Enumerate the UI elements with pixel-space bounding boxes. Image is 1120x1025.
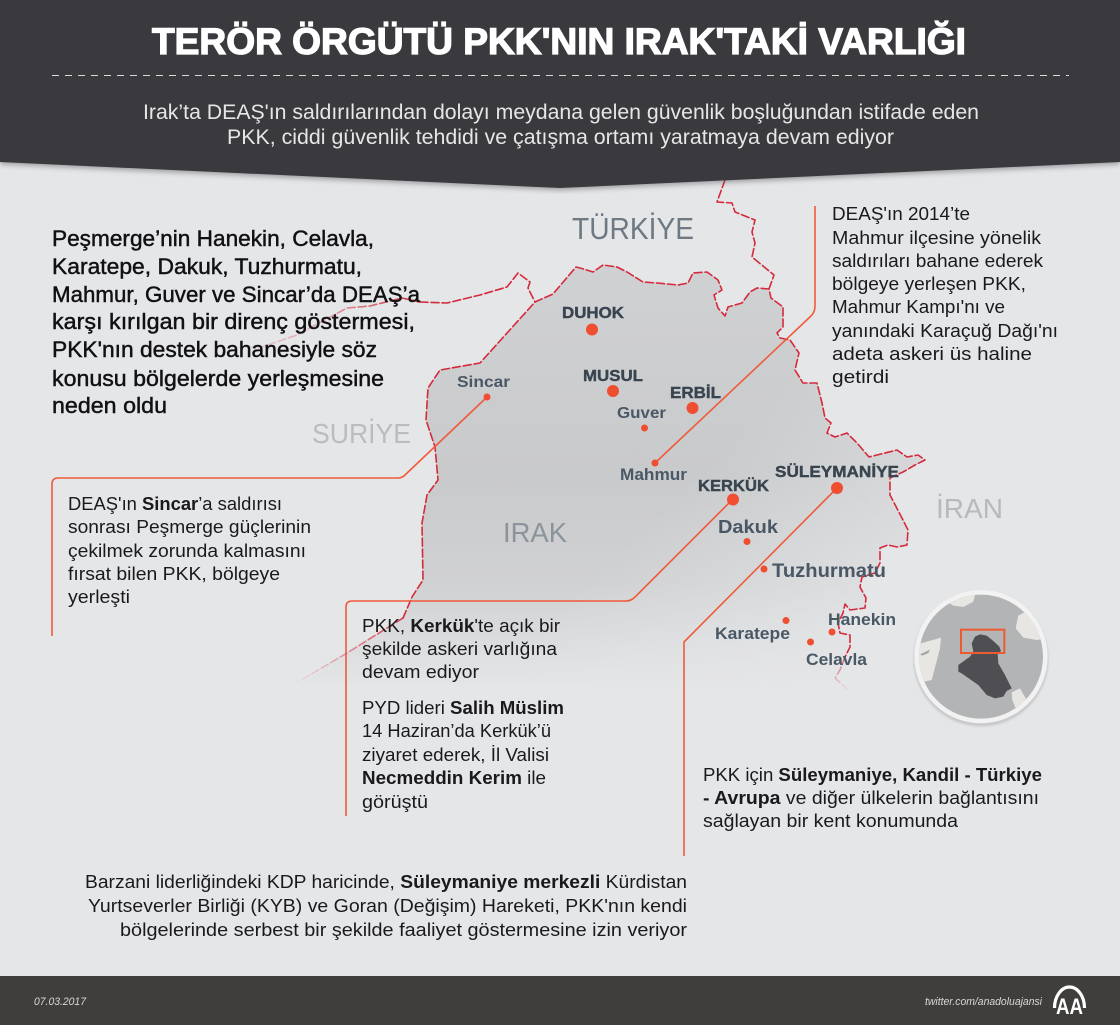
border: fading south east bbox=[835, 657, 848, 690]
leader line: Süleymaniye bbox=[684, 488, 837, 856]
text block: Peşmerge lead paragraph: Mahmur, Guver ve Sincar’da DEAŞ’a bbox=[52, 282, 421, 307]
text block: Mahmur: getirdi bbox=[832, 367, 889, 387]
label: İran: İRAN bbox=[936, 493, 1003, 524]
text block: Peşmerge lead paragraph bbox=[52, 226, 421, 418]
text block: KDP and KYB: bölgelerinde serbest bir şekilde faaliyet göstermesine izin veriyor bbox=[120, 920, 687, 940]
leader line: Mahmur bbox=[655, 206, 815, 463]
town: Tuzhurmatu: Tuzhurmatu bbox=[772, 561, 886, 582]
text block: KDP and KYB bbox=[85, 872, 687, 940]
city labels and markers bbox=[457, 305, 899, 669]
text block: Peşmerge lead paragraph: PKK'nın destek bahanesiyle söz bbox=[52, 337, 377, 362]
inset white ring bbox=[914, 590, 1048, 723]
town: Sincar: Sincar bbox=[457, 374, 510, 391]
header band bbox=[0, 0, 1120, 190]
town: Celavla: Celavla bbox=[806, 651, 868, 669]
leader line: Kerkük bbox=[346, 499, 733, 816]
city: Süleymaniye: SÜLEYMANİYE bbox=[775, 462, 899, 481]
town: Guver bbox=[617, 405, 666, 432]
text block: Mahmur: saldırıları bahane ederek bbox=[832, 251, 1044, 271]
text block: Peşmerge lead paragraph: konusu bölgelerde yerleşmesine bbox=[52, 366, 384, 391]
city: Musul bbox=[583, 368, 643, 397]
subtitle: Irak’ta DEAŞ'ın saldırılarından dolayı meydana gelen güvenlik boşluğundan istifade eden bbox=[143, 101, 979, 124]
city: Erbil bbox=[670, 384, 721, 414]
twitter handle: twitter.com/anadoluajansi bbox=[925, 996, 1043, 1008]
border: Syria and Turkey bbox=[420, 273, 535, 303]
text block: Sincar: fırsat bilen PKK, bölgeye bbox=[68, 564, 280, 584]
label: Suriye: SURİYE bbox=[312, 418, 411, 449]
text block: Peşmerge lead paragraph: Peşmerge’nin Hanekin, Celavla, bbox=[52, 226, 374, 251]
text block: Kerkük: PKK, Kerkük'te açık bir bbox=[362, 616, 560, 636]
date: 07.03.2017 bbox=[34, 996, 87, 1008]
text block: Sincar: çekilmek zorunda kalmasını bbox=[68, 541, 306, 561]
text block: Süleymaniye: sağlayan bir kent konumunda bbox=[703, 811, 959, 831]
town: Guver: Guver bbox=[617, 405, 666, 422]
text block: Mahmur: Mahmur ilçesine yönelik bbox=[832, 228, 1042, 248]
Iraq land shape bbox=[293, 265, 925, 690]
city: Kerkük bbox=[698, 476, 769, 506]
border: Iraq west and north bbox=[403, 265, 925, 657]
icon: Anadolu Agency logo: AA bbox=[1056, 994, 1083, 1019]
text block: Kerkük: görüştü bbox=[362, 792, 428, 812]
text block: Kerkük: 14 Haziran’da Kerkük’ü bbox=[362, 721, 551, 741]
city: Kerkük: KERKÜK bbox=[698, 476, 769, 495]
city: Süleymaniye bbox=[775, 462, 899, 494]
text block: Mahmur: adeta askeri üs haline bbox=[832, 344, 1032, 364]
text block: Kerkük: Necmeddin Kerim ile bbox=[362, 768, 546, 788]
city: Duhok bbox=[562, 305, 624, 336]
inset Cyprus bbox=[920, 650, 930, 656]
text block: Sincar: yerleşti bbox=[68, 587, 130, 607]
border: Syria and Turkey fading west bbox=[213, 298, 420, 348]
inset shadow bbox=[914, 592, 1048, 726]
header background bbox=[0, 0, 1120, 188]
icon: Anadolu Agency logo bbox=[1054, 987, 1084, 1019]
border: fading south west bbox=[293, 618, 403, 685]
text block: Sincar: sonrası Peşmerge güçlerinin bbox=[68, 517, 311, 537]
text block: Kerkük bbox=[362, 616, 564, 812]
text block: Kerkük: ziyaret ederek, İl Valisi bbox=[362, 745, 549, 765]
text block: Kerkük: şekilde askeri varlığına bbox=[362, 639, 558, 659]
town: Karatepe: Karatepe bbox=[715, 624, 790, 643]
leader line: Sincar bbox=[52, 397, 487, 636]
subtitle bbox=[143, 101, 979, 149]
text block: Süleymaniye: - Avrupa ve diğer ülkelerin bağlantısını bbox=[703, 788, 1039, 808]
text block: KDP and KYB: Yurtseverler Birliği (KYB) ve Goran (Değişim) Hareketi, PKK'nın kendi bbox=[88, 896, 687, 916]
text block: Kerkük: devam ediyor bbox=[362, 662, 479, 682]
town: Dakuk: Dakuk bbox=[718, 517, 779, 537]
text block: Mahmur: DEAŞ'ın 2014’te bbox=[832, 204, 970, 224]
city: Duhok: DUHOK bbox=[562, 305, 624, 322]
leader lines bbox=[52, 206, 837, 856]
inset highlight rectangle bbox=[961, 630, 1004, 653]
text block: Mahmur: yanındaki Karaçuğ Dağı'nı bbox=[832, 321, 1058, 341]
town: Sincar bbox=[457, 374, 510, 400]
town: Dakuk bbox=[718, 517, 779, 545]
Iraq land eastern fade bbox=[293, 265, 925, 690]
text block: Süleymaniye: PKK için Süleymaniye, Kandil - Türkiye bbox=[703, 765, 1042, 785]
dashed divider bbox=[52, 74, 1069, 76]
city: Musul: MUSUL bbox=[583, 368, 643, 385]
town: Mahmur: Mahmur bbox=[620, 465, 687, 484]
text block: Mahmur: bölgeye yerleşen PKK, bbox=[832, 274, 1026, 294]
subtitle: PKK, ciddi güvenlik tehdidi ve çatışma ortamı yaratmaya devam ediyor bbox=[227, 126, 894, 149]
map: Iraq region bbox=[213, 180, 925, 690]
text block: Mahmur bbox=[832, 204, 1058, 387]
inset locator map bbox=[914, 590, 1048, 726]
inset land bbox=[919, 595, 1043, 719]
title: TERÖR ÖRGÜTÜ PKK'NIN IRAK'TAKİ VARLIĞI bbox=[152, 21, 966, 62]
text block: Kerkük: PYD lideri Salih Müslim bbox=[362, 698, 564, 718]
footer band bbox=[0, 976, 1120, 1025]
text block: Peşmerge lead paragraph: karşı kırılgan bir direnç göstermesi, bbox=[52, 309, 415, 334]
text block: Peşmerge lead paragraph: neden oldu bbox=[52, 393, 167, 418]
inset seas bbox=[919, 595, 1040, 708]
country labels bbox=[312, 211, 1003, 548]
inset Iraq silhouette bbox=[958, 634, 1012, 698]
town: Celavla bbox=[806, 638, 868, 669]
border: Turkey and Iran bbox=[717, 180, 774, 289]
text block: Peşmerge lead paragraph: Karatepe, Dakuk, Tuzhurmatu, bbox=[52, 254, 362, 279]
label: Irak: IRAK bbox=[503, 517, 567, 548]
text block: KDP and KYB: Barzani liderliğindeki KDP haricinde, Süleymaniye merkezli Kürdistan bbox=[85, 872, 687, 892]
text block: Mahmur: Mahmur Kampı'nı ve bbox=[832, 297, 1005, 317]
label: Türkiye: TÜRKİYE bbox=[572, 211, 694, 246]
header shadow bbox=[0, 150, 1120, 190]
town: Hanekin: Hanekin bbox=[828, 610, 896, 629]
footer background bbox=[0, 976, 1120, 1025]
text block: Süleymaniye bbox=[703, 765, 1042, 831]
city: Erbil: ERBİL bbox=[670, 384, 721, 402]
text block: Sincar bbox=[68, 494, 311, 607]
text block: Sincar: DEAŞ'ın Sincar’a saldırısı bbox=[68, 494, 282, 514]
